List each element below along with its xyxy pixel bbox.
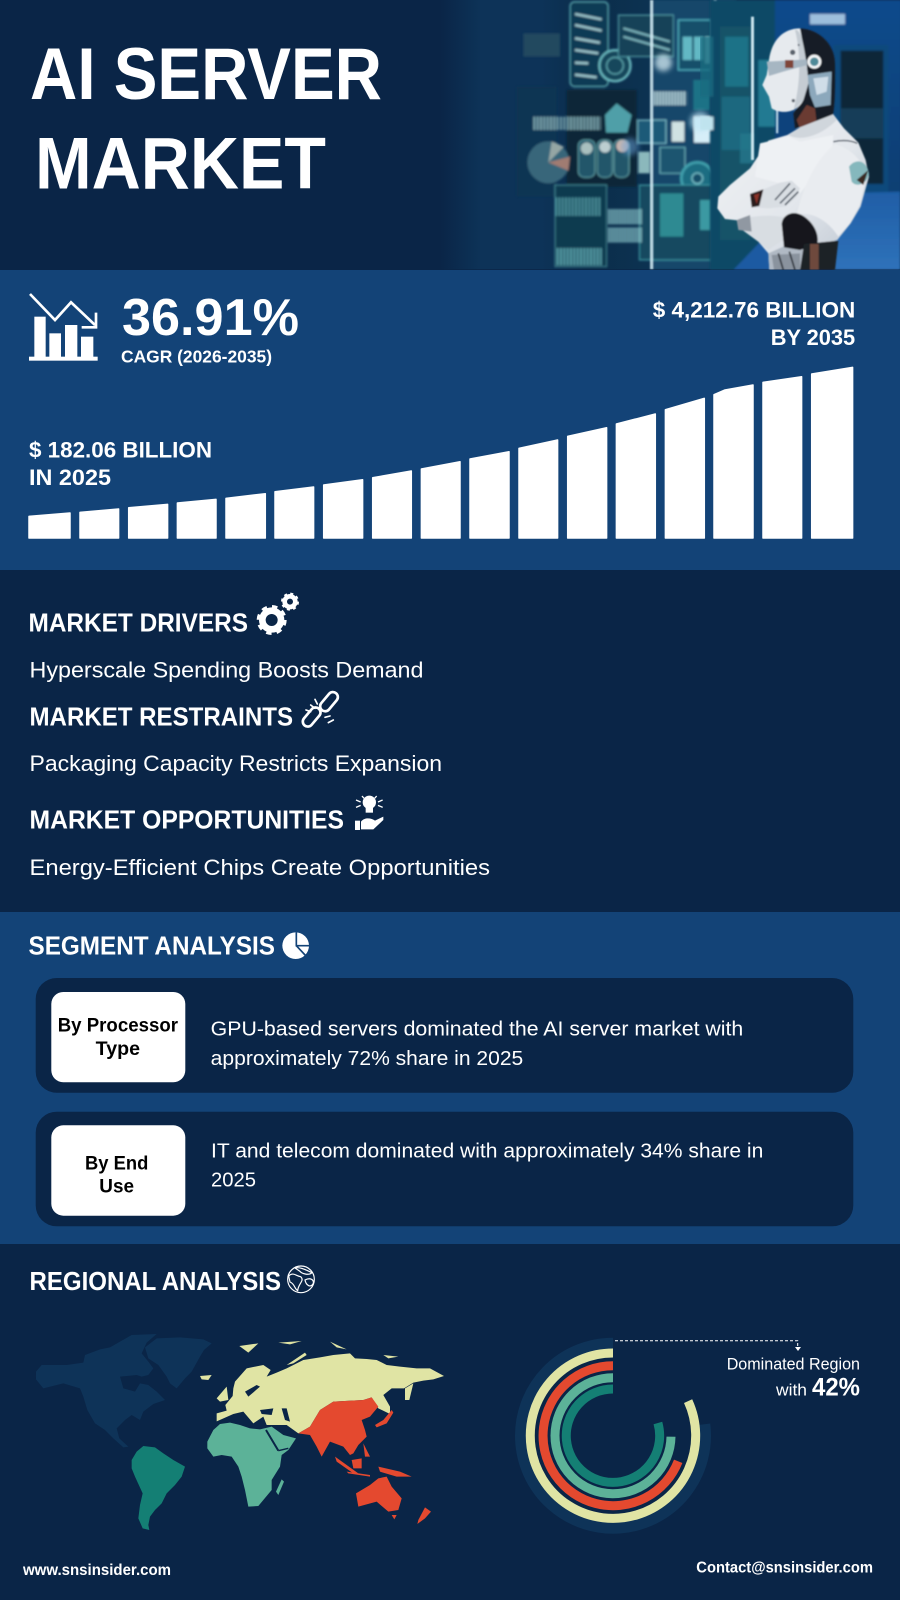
callout: dominated region: 42% — [812, 1373, 860, 1401]
panel: market dynamics — [0, 570, 900, 912]
panel: market growth — [0, 270, 900, 570]
glowing rack lines — [650, 0, 717, 269]
text: processor share: approximately 72% share in 2025 — [211, 1047, 523, 1070]
robot neck and back of head — [793, 28, 835, 128]
panel: regional analysis — [0, 1244, 900, 1600]
icon: broken chain — [301, 690, 340, 729]
room behind the robot — [700, 0, 900, 270]
icon: gears — [258, 594, 298, 633]
map: world regions — [36, 1334, 444, 1530]
label: 2035 value — [653, 298, 855, 350]
panel: segment analysis — [0, 912, 900, 1244]
callout: dominated region leader line — [615, 1341, 801, 1351]
title: MARKET — [35, 122, 326, 205]
image: robot with crossed arms — [700, 0, 900, 270]
icon: pie chart — [282, 932, 309, 959]
region: South America — [132, 1446, 185, 1530]
text: end use share: IT and telecom dominated with approximately 34% share in — [211, 1139, 763, 1162]
label: 2025 value: IN 2025 — [29, 465, 111, 490]
heading: regional analysis: REGIONAL ANALYSIS — [30, 1268, 281, 1296]
title: AI SERVER — [30, 32, 382, 115]
label box: by processor type: By Processor — [58, 1015, 178, 1037]
callout: dominated region — [727, 1355, 860, 1401]
region: Asia Pacific — [298, 1397, 431, 1524]
heading: market drivers: MARKET DRIVERS — [28, 610, 248, 638]
robot hand — [758, 180, 800, 208]
label box: by processor type — [51, 992, 185, 1082]
heading: market restraints: MARKET RESTRAINTS — [30, 704, 293, 732]
label box: by end use — [51, 1125, 185, 1216]
label: 2025 value: $ 182.06 BILLION — [29, 438, 212, 463]
text: opportunity: Energy-Efficient Chips Create Opportunities — [30, 855, 490, 880]
card: by end use — [36, 1112, 853, 1226]
region: Africa and Middle East — [207, 1423, 296, 1507]
label box: by end use: By End — [85, 1152, 148, 1174]
panel: header — [0, 0, 900, 270]
text: end use share: 2025 — [211, 1169, 256, 1192]
label: 2025 value — [29, 438, 212, 490]
text: restraint: Packaging Capacity Restricts Expansion — [30, 751, 442, 776]
text: driver: Hyperscale Spending Boosts Demand — [30, 657, 424, 682]
label box: by end use: Use — [99, 1175, 134, 1197]
callout: dominated region: Dominated Region — [727, 1355, 860, 1373]
card: by processor type — [36, 978, 853, 1093]
stat: CAGR: CAGR (2026-2035) — [121, 347, 272, 367]
label box: by processor type: Type — [96, 1038, 140, 1060]
footer: website: www.snsinsider.com — [22, 1562, 171, 1579]
heading: market opportunities: MARKET OPPORTUNITIES — [30, 807, 344, 835]
callout: dominated region: with — [775, 1381, 807, 1399]
robot torso and arms — [717, 114, 869, 270]
bar chart — [29, 367, 853, 538]
robot face — [762, 28, 808, 112]
region: Europe and Russia — [200, 1341, 444, 1433]
title — [30, 32, 382, 205]
icon: hand with light bulb — [355, 796, 383, 830]
image: server rack with data panels — [440, 0, 737, 269]
text: end use share — [211, 1139, 763, 1192]
stat: CAGR: 36.91% — [122, 289, 299, 347]
text: processor share: GPU-based servers dominated the AI server market with — [211, 1018, 743, 1041]
icon: chart with trend arrow — [29, 294, 98, 361]
chart: radial rings — [521, 1344, 705, 1528]
text: processor share — [211, 1018, 743, 1070]
footer: contact: Contact@snsinsider.com — [696, 1560, 873, 1577]
region: North America — [36, 1334, 212, 1447]
icon: globe — [288, 1266, 314, 1293]
heading: segment analysis: SEGMENT ANALYSIS — [28, 932, 275, 960]
label: 2035 value: BY 2035 — [771, 325, 855, 350]
robot forearm cuff and hip — [782, 213, 818, 250]
robot shoulder patch — [849, 161, 869, 185]
label: 2035 value: $ 4,212.76 BILLION — [653, 298, 855, 323]
